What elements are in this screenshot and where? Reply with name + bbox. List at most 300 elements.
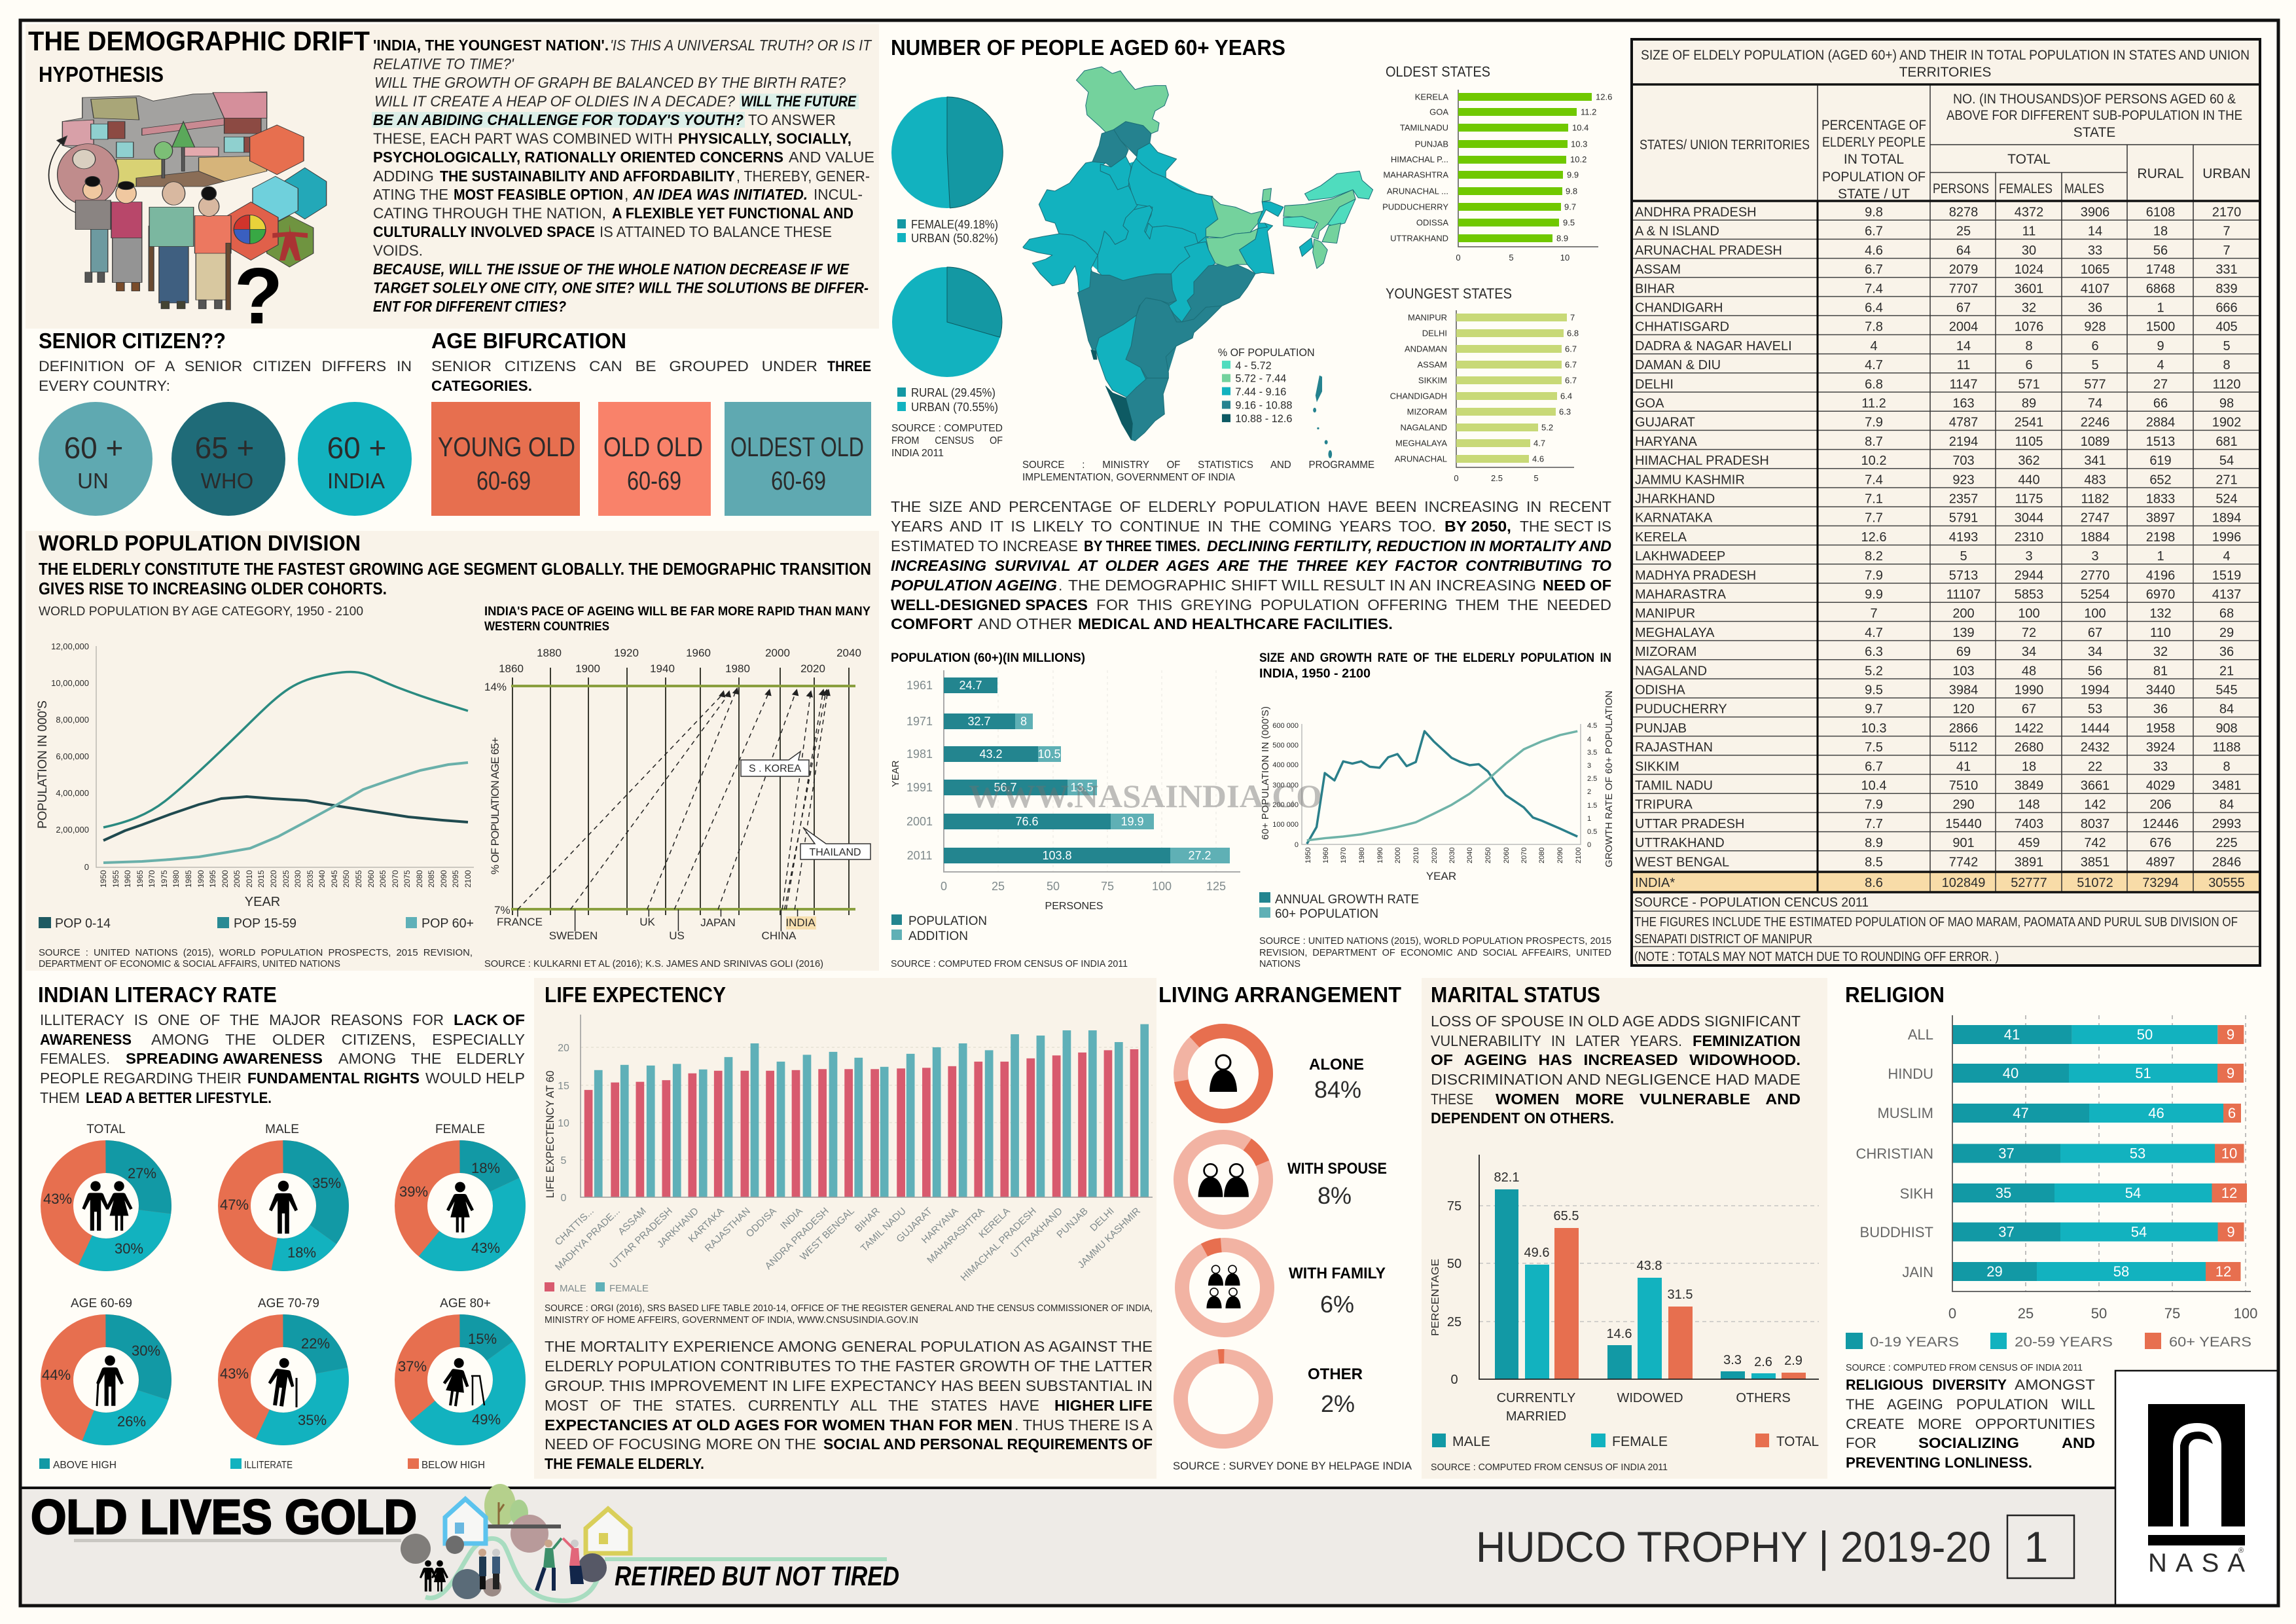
table: elderly population in states and union territories: 1519 (2212, 568, 2241, 583)
stacked bar chart: religion: 50 (2137, 1026, 2153, 1043)
bar chart: life expectancy at 60: PUNJAB (1054, 1206, 1090, 1240)
stacked bar chart: religion: 54 (2131, 1224, 2147, 1240)
table: elderly population in states and union territories: 6.8 (1865, 377, 1883, 391)
age bifurcation heading: AGE BIFURCATION (431, 329, 626, 353)
bar chart: life expectancy at 60: TAMIL NADU (859, 1206, 908, 1254)
bar chart: population 60+ in millions: 125 (1206, 880, 1226, 893)
pace of ageing source: SOURCE : KULKARNI ET AL (2016); K.S. JAMES AND SRINIVAS GOLI (2016) (484, 958, 823, 969)
ring: other: OTHER (1308, 1365, 1363, 1383)
line chart: size and growth rate of elderly: 2070 (1520, 848, 1528, 863)
bar chart: population 60+ in millions: 25 (992, 880, 1005, 893)
ring: with spouse (1164, 1120, 1387, 1239)
stacked bar chart: religion: 9 (2227, 1065, 2234, 1081)
hypothesis text block: BECAUSE, WILL THE ISSUE OF THE WHOLE NATION DECREASE IF WE (373, 261, 850, 278)
table: elderly population in states and union territories: 405 (2215, 320, 2238, 334)
bar chart: population 60+ in millions: 43.2 (979, 748, 1003, 761)
table: elderly population in states and union territories: TAMIL NADU (1635, 779, 1713, 793)
table: elderly population in states and union territories: 1076 (2015, 320, 2043, 334)
line chart: size and growth rate of elderly: 300 000 (1272, 782, 1299, 789)
life expectancy legend: MALE (560, 1283, 586, 1294)
table: elderly population in states and union territories: 2004 (1949, 320, 1978, 334)
table: elderly population in states and union territories: 6.7 (1865, 759, 1883, 774)
senior citizen definition text: DEFINITION OF A SENIOR CITIZEN DIFFERS IN (39, 358, 412, 374)
bar chart: marital status: 0 (1450, 1373, 1458, 1387)
line chart: world population by age: 2010 (245, 870, 254, 888)
life expectancy paragraph: ELDERLY POPULATION CONTRIBUTES TO THE FASTER GROWTH OF THE LATTER (545, 1358, 1153, 1375)
bar chart: youngest states: CHANDIGADH (1390, 391, 1447, 401)
line chart: size and growth rate of elderly: 1970 (1340, 848, 1348, 863)
table: elderly population in states and union territories: DELHI (1635, 377, 1674, 391)
life expectancy paragraph: THE MORTALITY EXPERIENCE AMONG GENERAL POPULATION AS AGAINST THE (545, 1338, 1153, 1355)
elderly population paragraph: AND OTHER (978, 615, 1072, 632)
table: elderly population in states and union territories: 73294 (2142, 876, 2179, 890)
table: elderly population in states and union territories: 11107 (1946, 588, 1981, 602)
literacy paragraph: WOULD HELP (425, 1070, 525, 1087)
bar chart: life expectancy at 60: LIFE EXPECTENCY AT 60 (544, 1071, 556, 1198)
line chart: size and growth rate of elderly: 2040 (1466, 848, 1474, 863)
pie chart: rural vs urban: RURAL (29.45%) (911, 386, 996, 399)
pie chart source: FROM CENSUS OF (891, 435, 1003, 446)
table: elderly population in states and union territories: 4897 (2146, 855, 2175, 869)
line chart: size and growth rate of elderly: 3 (1587, 762, 1591, 770)
chart: pace of ageing timeline: INDIA (785, 916, 816, 929)
table: elderly population in states and union territories: 9.9 (1865, 588, 1883, 602)
bar chart: oldest states: 10.3 (1571, 139, 1587, 149)
bar chart: youngest states: ASSAM (1417, 360, 1447, 369)
line chart: size and growth rate of elderly: 4 (1587, 736, 1591, 744)
table: elderly population in states and union territories: 6108 (2146, 206, 2175, 220)
table: elderly population in states and union territories: 4.7 (1865, 358, 1883, 372)
bar chart: youngest states: 4.7 (1534, 439, 1545, 448)
bar chart: marital status: PERCENTAGE (1430, 1259, 1441, 1336)
stacked bar chart: religion: HINDU (1888, 1066, 1933, 1082)
line chart: world population by age: 2090 (439, 870, 448, 888)
stacked bar chart: religion: JAIN (1902, 1264, 1933, 1280)
table: elderly population in states and union territories: 908 (2215, 721, 2238, 736)
bar chart: population 60+ in millions: 10.5 (1037, 748, 1061, 761)
hypothesis text block: THESE, EACH PART WAS COMBINED WITH (373, 130, 673, 147)
table: elderly population in states and union territories: 6.3 (1865, 645, 1883, 659)
senior citizen age circles: 60 + (64, 431, 123, 465)
chart: pace of ageing timeline: 1860 (499, 662, 524, 675)
table: elderly population in states and union territories: 2541 (2015, 416, 2043, 430)
table: elderly population in states and union territories: 6.4 (1865, 301, 1883, 316)
table: elderly population in states and union territories: 66 (2153, 397, 2168, 411)
table: elderly population in states and union territories: 5791 (1949, 511, 1978, 526)
life expectancy legend: FEMALE (609, 1283, 649, 1294)
table: elderly population in states and union territories: MANIPUR (1635, 607, 1695, 621)
table: elderly population in states and union territories: PUNJAB (1635, 721, 1687, 736)
table: elderly population in states and union territories: MADHYA PRADESH (1635, 568, 1756, 583)
table: elderly population in states and union territories: 5112 (1949, 740, 1978, 755)
table: elderly population in states and union territories: SIKKIM (1635, 759, 1679, 774)
table: elderly population in states and union territories: 67 (2088, 626, 2102, 640)
map legend: 9.16 - 10.88 (1235, 400, 1292, 412)
bar chart: oldest states: 9.8 (1566, 186, 1577, 196)
nasa logo (2115, 1371, 2278, 1606)
religion paragraph: AND (2062, 1435, 2095, 1451)
table: elderly population in states and union territories: 2357 (1949, 492, 1978, 507)
chart: pace of ageing timeline: 7% (494, 904, 511, 916)
bar chart: oldest states: 0 (1456, 253, 1461, 262)
table: elderly population in states and union territories: 341 (2084, 454, 2106, 468)
table: elderly population in states and union territories: JHARKHAND (1635, 492, 1715, 507)
bar chart: oldest states: 10.2 (1570, 154, 1587, 164)
stacked bar chart: religion: 100 (2234, 1305, 2257, 1322)
table: elderly population in states and union territories: 1996 (2212, 530, 2241, 545)
marital status source: SOURCE : COMPUTED FROM CENSUS OF INDIA 2011 (1431, 1462, 1668, 1473)
line chart: world population by age: 1985 (184, 870, 193, 888)
life expectancy source (545, 1303, 1153, 1326)
hypothesis text block: , THEREBY, GENER- (736, 168, 870, 185)
table: elderly population in states and union territories: 2747 (2081, 511, 2109, 526)
line chart: world population by age: 1960 (123, 870, 132, 888)
table: elderly population in states and union territories: 7.8 (1865, 320, 1883, 334)
religion legend (1846, 1333, 2251, 1350)
elderly population paragraph: DECLINING FERTILITY, REDUCTION IN MORTALITY AND (1207, 537, 1611, 554)
stacked bar chart: religion: 12 (2215, 1263, 2231, 1280)
table: elderly population in states and union territories: 4 (2223, 549, 2231, 564)
table: elderly population in states and union territories: PUDUCHERRY (1635, 702, 1727, 717)
table: elderly population in states and union territories: MAHARASTRA (1635, 588, 1727, 602)
bar chart: life expectancy at 60: KARTAKA (687, 1206, 726, 1245)
stacked bar chart: religion: 9 (2227, 1224, 2235, 1240)
bar chart: population 60+ in millions: 1981 (906, 748, 933, 761)
competition title: HUDCO TROPHY | 2019-20 (1476, 1523, 1991, 1571)
table: elderly population in states and union territories: 33 (2153, 759, 2168, 774)
table: elderly population in states and union territories: 1089 (2081, 435, 2109, 449)
table: elderly population in states and union territories: 1513 (2146, 435, 2175, 449)
pace of ageing heading: WESTERN COUNTRIES (484, 620, 609, 634)
table: elderly population in states and union territories: WEST BENGAL (1635, 855, 1729, 869)
table: elderly population in states and union territories: 928 (2084, 320, 2106, 334)
chart: pace of ageing timeline: 1940 (650, 662, 675, 675)
world population source: DEPARTMENT OF ECONOMIC & SOCIAL AFFAIRS, UNITED NATIONS (39, 958, 340, 969)
bar chart: life expectancy at 60: MAHARASHTRA (925, 1206, 987, 1266)
chart: pace of ageing timeline: 2000 (765, 647, 790, 659)
elderly population paragraph: YEARS AND IT IS LIKELY TO CONTINUE IN THE COMING YEARS TOO. (891, 518, 1436, 535)
line chart: world population by age: YEAR (245, 895, 280, 909)
table: elderly population in states and union territories: 5713 (1949, 568, 1978, 583)
donut: male literacy (220, 1123, 341, 1261)
table: elderly population in states and union territories: 67 (1956, 301, 1971, 316)
table: elderly population in states and union territories: 2846 (2212, 855, 2241, 869)
table: elderly population in states and union territories: KARNATAKA (1635, 511, 1713, 526)
chart: pace of ageing timeline (484, 647, 870, 942)
population chart heading: POPULATION (60+)(IN MILLIONS) (891, 651, 1085, 665)
bar chart: oldest states: 10 (1560, 253, 1570, 262)
ring: with spouse: 8% (1318, 1182, 1352, 1209)
table: elderly population in states and union territories: HARYANA (1635, 435, 1698, 449)
stacked bar chart: religion: 9 (2227, 1026, 2234, 1043)
bar chart: population 60+ in millions: 1971 (906, 715, 933, 728)
growth chart heading: INDIA, 1950 - 2100 (1259, 667, 1371, 681)
bar chart: youngest states: 5.2 (1541, 423, 1553, 432)
table: elderly population in states and union territories: 18 (2022, 759, 2036, 774)
hypothesis heading: HYPOTHESIS (39, 62, 164, 86)
line chart: world population by age: 2095 (451, 870, 460, 888)
table: elderly population in states and union territories: 51072 (2077, 876, 2113, 890)
pie chart: rural vs urban (892, 267, 1002, 414)
life expectancy source: MINISTRY OF HOME AFFEIRS, GOVERNMENT OF INDIA, WWW.CNSUSINDIA.GOV.IN (545, 1314, 918, 1326)
donut: female literacy: 18% (471, 1160, 500, 1176)
table: elderly population in states and union territories: 139 (1952, 626, 1975, 640)
senior citizen age circles (39, 402, 412, 516)
stacked bar chart: religion: 0 (1948, 1305, 1956, 1322)
donut: female literacy: 43% (471, 1240, 500, 1256)
religion paragraph: FOR (1846, 1435, 1876, 1451)
bar chart: youngest states: 2.5 (1491, 473, 1503, 483)
bar chart: youngest states: MEGHALAYA (1395, 439, 1447, 448)
hypothesis text block (372, 37, 874, 315)
table: elderly population in states and union territories: 4372 (2015, 206, 2043, 220)
line chart: size and growth rate of elderly: 2020 (1431, 848, 1439, 863)
world population legend: POP 0-14 (55, 916, 111, 931)
pie chart: female vs male (891, 97, 1003, 245)
donut: age 80+ literacy: 37% (398, 1358, 427, 1375)
bar chart: population 60+ in millions: 56.7 (994, 781, 1017, 794)
table: elderly population in states and union territories: 8 (2223, 759, 2231, 774)
hypothesis text block: WILL THE GROWTH OF GRAPH BE BALANCED BY THE BIRTH RATE? (374, 74, 846, 91)
ring: living alone: 84% (1314, 1076, 1361, 1103)
table: elderly population in states and union territories: 36 (2153, 702, 2168, 717)
table: elderly population in states and union territories: 290 (1952, 798, 1975, 812)
table: elderly population in states and union territories: UTTRAKHAND (1635, 836, 1725, 850)
table: elderly population in states and union territories: 9 (2157, 339, 2164, 353)
world population statement (39, 559, 871, 598)
table: elderly population in states and union territories: 6 (2091, 339, 2099, 353)
hypothesis text block: WILL THE FUTURE (741, 93, 857, 110)
life expectancy paragraph: . THUS THERE IS A (1014, 1416, 1153, 1434)
table: elderly population in states and union territories: 200 (1952, 607, 1975, 621)
line chart: size and growth rate of elderly: 100 000 (1272, 821, 1299, 829)
table: elderly population in states and union territories: 1990 (2015, 683, 2043, 698)
table: elderly population in states and union territories: 5 (2091, 358, 2099, 372)
marital status legend: MALE (1452, 1434, 1490, 1449)
table: elderly population in states and union territories: 34 (2022, 645, 2036, 659)
table: elderly population in states and union territories: 8.5 (1865, 855, 1883, 869)
table: elderly population in states and union territories: 8.7 (1865, 435, 1883, 449)
bar chart: oldest states: PUNJAB (1415, 139, 1448, 149)
table: elderly population in states and union territories: 14 (1956, 339, 1971, 353)
stacked bar chart: religion: 75 (2164, 1305, 2180, 1322)
hypothesis text block: 'IS THIS A UNIVERSAL TRUTH? OR IS IT (610, 37, 872, 54)
table: elderly population in states and union territories: 331 (2215, 262, 2238, 277)
table: elderly population in states and union territories: RAJASTHAN (1635, 740, 1713, 755)
bar chart: oldest states: KERELA (1415, 92, 1448, 102)
bar chart: marital status: 2.9 (1784, 1354, 1803, 1368)
table: elderly population in states and union territories: 3849 (2015, 779, 2043, 793)
hypothesis text block: ATING THE (373, 186, 448, 203)
chart: pace of ageing timeline: 2040 (836, 647, 861, 659)
table: elderly population in states and union territories: (NOTE : TOTALS MAY NOT MATCH DUE TO ROUNDING OFF ERROR. ) (1634, 950, 1999, 964)
table: elderly population in states and union territories: 4137 (2212, 588, 2241, 602)
line chart: world population by age: 2080 (415, 870, 424, 888)
table: elderly population in states and union territories: 3891 (2015, 855, 2043, 869)
table: elderly population in states and union territories: DADRA & NAGAR HAVELI (1635, 339, 1792, 353)
chart: pace of ageing timeline: FRANCE (497, 916, 543, 928)
age bifurcation text: CATEGORIES. (431, 378, 532, 394)
line chart: size and growth rate of elderly: 1 (1587, 815, 1591, 823)
table: elderly population in states and union territories: 1120 (2212, 377, 2241, 391)
pie chart source: INDIA 2011 (891, 448, 944, 459)
table: elderly population in states and union territories: 5254 (2081, 588, 2109, 602)
life expectancy paragraph: SOCIAL AND PERSONAL REQUIREMENTS OF (823, 1435, 1153, 1453)
table: elderly population in states and union territories: NAGALAND (1635, 664, 1707, 678)
bar chart: population 60+ in millions: 1991 (906, 781, 933, 794)
table: elderly population in states and union territories: 4 (1870, 339, 1878, 353)
table: elderly population in states and union territories: IN TOTAL (1844, 152, 1904, 167)
table: elderly population in states and union territories: 901 (1952, 836, 1975, 850)
table: elderly population in states and union territories: 29 (2219, 626, 2234, 640)
line chart: world population by age: 1990 (196, 870, 206, 888)
table: elderly population in states and union territories: 1422 (2015, 721, 2043, 736)
table: elderly population in states and union territories: 3924 (2146, 740, 2175, 755)
table: elderly population in states and union territories: 4107 (2081, 281, 2109, 296)
life expectancy legend (545, 1282, 649, 1294)
line chart: size and growth rate of elderly (1260, 691, 1615, 882)
table: elderly population in states and union territories: 1188 (2212, 740, 2241, 755)
line chart: size and growth rate of elderly: 200 000 (1272, 801, 1299, 809)
table: elderly population in states and union territories: 2944 (2015, 568, 2043, 583)
table: elderly population in states and union territories: 9.8 (1865, 206, 1883, 220)
table: elderly population in states and union territories: 839 (2215, 281, 2238, 296)
hypothesis text block: MOST FEASIBLE OPTION (454, 186, 623, 203)
table: elderly population in states and union territories: 4 (2157, 358, 2164, 372)
line chart: size and growth rate of elderly: 2060 (1503, 848, 1511, 863)
table: elderly population in states and union territories: 120 (1952, 702, 1975, 717)
line chart: world population by age: 12,00,000 (51, 641, 89, 651)
table: elderly population in states and union territories: 1884 (2081, 530, 2109, 545)
table: elderly population in states and union territories: 84 (2219, 798, 2234, 812)
table: elderly population in states and union territories: 3906 (2081, 206, 2109, 220)
line chart: world population by age: 2075 (403, 870, 412, 888)
table: elderly population in states and union territories: 7.5 (1865, 740, 1883, 755)
bar chart: population 60+ in millions: 24.7 (959, 679, 982, 692)
map legend (1218, 347, 1315, 425)
table: elderly population in states and union territories: 2246 (2081, 416, 2109, 430)
elderly population paragraph: THE DEMOGRAPHIC SHIFT WILL RESULT IN AN INCREASING (1068, 577, 1536, 594)
growth chart source: SOURCE : UNITED NATIONS (2015), WORLD POPULATION PROSPECTS, 2015 (1259, 935, 1611, 947)
table: elderly population in states and union territories: 7510 (1949, 779, 1978, 793)
table: elderly population in states and union territories: 362 (2018, 454, 2040, 468)
table: elderly population in states and union territories: 36 (2088, 301, 2102, 316)
bar chart: population 60+ in millions: 100 (1152, 880, 1172, 893)
stacked bar chart: religion: 41 (2004, 1026, 2020, 1043)
table: elderly population in states and union territories: BIHAR (1635, 281, 1675, 296)
ring: other: 2% (1321, 1390, 1355, 1417)
stacked bar chart: religion (1856, 1015, 2257, 1322)
table: elderly population in states and union territories: 923 (1952, 473, 1975, 487)
table: elderly population in states and union territories: 100 (2084, 607, 2106, 621)
religion legend: 60+ YEARS (2169, 1335, 2251, 1350)
table: elderly population in states and union territories: 2310 (2015, 530, 2043, 545)
population chart legend: POPULATION (908, 914, 987, 928)
table: elderly population in states and union territories: 4.7 (1865, 626, 1883, 640)
table: elderly population in states and union territories: 3440 (2146, 683, 2175, 698)
hypothesis text block: WILL IT CREATE A HEAP OF OLDIES IN A DECADE? (374, 93, 735, 110)
line chart: world population by age: 1975 (160, 870, 169, 888)
donut: male literacy: 47% (220, 1197, 249, 1213)
religion paragraph: THE AGEING POPULATION WILL (1846, 1396, 2095, 1413)
bar chart: life expectancy at 60: HARYANA (920, 1206, 961, 1246)
line chart: world population by age: 2005 (232, 870, 242, 888)
line chart: size and growth rate of elderly: 1960 (1322, 848, 1330, 863)
stacked bar chart: religion: 53 (2130, 1146, 2145, 1161)
marital status paragraph: WOMEN MORE VULNERABLE AND (1496, 1091, 1801, 1108)
table: elderly population in states and union territories: 18 (2153, 225, 2168, 239)
table: elderly population in states and union territories: 98 (2219, 397, 2234, 411)
line chart: size and growth rate of elderly: 2.5 (1587, 775, 1597, 783)
line chart: world population by age: 2045 (330, 870, 339, 888)
ring: other (1177, 1352, 1363, 1445)
table: elderly population in states and union territories: 7403 (2015, 817, 2043, 831)
elderly population paragraph: POPULATION AGEING (891, 577, 1057, 594)
donut: total literacy: 30% (115, 1240, 143, 1257)
senior citizen definition text: EVERY COUNTRY: (39, 378, 170, 394)
table: elderly population in states and union territories: 676 (2149, 836, 2172, 850)
donut: total literacy: 27% (128, 1165, 156, 1182)
religion paragraph: RELIGIOUS DIVERSITY (1846, 1377, 2007, 1393)
table: elderly population in states and union territories: 56 (2088, 664, 2102, 678)
stacked bar chart: religion: 47 (2013, 1105, 2029, 1121)
line chart: size and growth rate of elderly: 1950 (1304, 848, 1312, 863)
stacked bar chart: religion: MUSLIM (1877, 1105, 1933, 1121)
literacy paragraph: SPREADING AWARENESS (126, 1050, 323, 1067)
table: elderly population in states and union territories: 25 (1956, 225, 1971, 239)
bar chart: marital status: CURRENTLY (1497, 1391, 1575, 1405)
table: elderly population in states and union territories: 32 (2153, 645, 2168, 659)
chart: pace of ageing timeline: % OF POPULATION AGE 65+ (489, 737, 501, 875)
table: elderly population in states and union territories: PERSONS (1933, 181, 1989, 196)
table: elderly population in states and union territories: 3481 (2212, 779, 2241, 793)
line chart: size and growth rate of elderly: 0 (1295, 841, 1299, 849)
literacy legend: BELOW HIGH (422, 1460, 485, 1471)
table: elderly population in states and union territories: 8.9 (1865, 836, 1883, 850)
bar chart: marital status: OTHERS (1736, 1391, 1791, 1405)
chart: pace of ageing timeline: 1920 (614, 647, 639, 659)
table: elderly population in states and union territories: 3601 (2015, 281, 2043, 296)
pie chart source: SOURCE : COMPUTED (891, 423, 1003, 434)
stacked bar chart: religion: 29 (1986, 1263, 2003, 1280)
bar chart: life expectancy at 60 (544, 1015, 1153, 1284)
ring: living alone (1163, 1013, 1364, 1134)
world population legend: POP 60+ (422, 916, 474, 931)
hypothesis text block: , (624, 186, 628, 203)
table: elderly population in states and union territories: 1500 (2146, 320, 2175, 334)
table: elderly population in states and union territories: SENAPATI DISTRICT OF MANIPUR (1634, 932, 1812, 947)
table: elderly population in states and union territories: 2866 (1949, 721, 1978, 736)
table: elderly population in states and union territories: 142 (2084, 798, 2106, 812)
bar chart: youngest states: ARUNACHAL (1395, 454, 1447, 463)
bar chart: marital status: 3.3 (1723, 1353, 1742, 1367)
line chart: size and growth rate of elderly: 2030 (1448, 848, 1456, 863)
table: elderly population in states and union territories: 4029 (2146, 779, 2175, 793)
table: elderly population in states and union territories: 7 (2223, 244, 2231, 258)
table: elderly population in states and union territories: 10.3 (1861, 721, 1886, 736)
table: elderly population in states and union territories: 22 (2088, 759, 2102, 774)
table: elderly population in states and union territories: ASSAM (1635, 262, 1681, 277)
donut: age 70-79 literacy: AGE 70-79 (258, 1297, 319, 1310)
table: elderly population in states and union territories: 2432 (2081, 740, 2109, 755)
table: elderly population in states and union territories: 5 (2223, 339, 2231, 353)
hypothesis text block: AND VALUE (789, 149, 874, 166)
bar chart: oldest states: 5 (1509, 253, 1514, 262)
table: elderly population in states and union territories: 30 (2022, 244, 2036, 258)
literacy paragraph: AMONG THE OLDER CITIZENS, ESPECIALLY (151, 1031, 525, 1048)
senior citizen definition text (39, 358, 412, 394)
age category tiles: OLDEST OLD (730, 431, 864, 462)
